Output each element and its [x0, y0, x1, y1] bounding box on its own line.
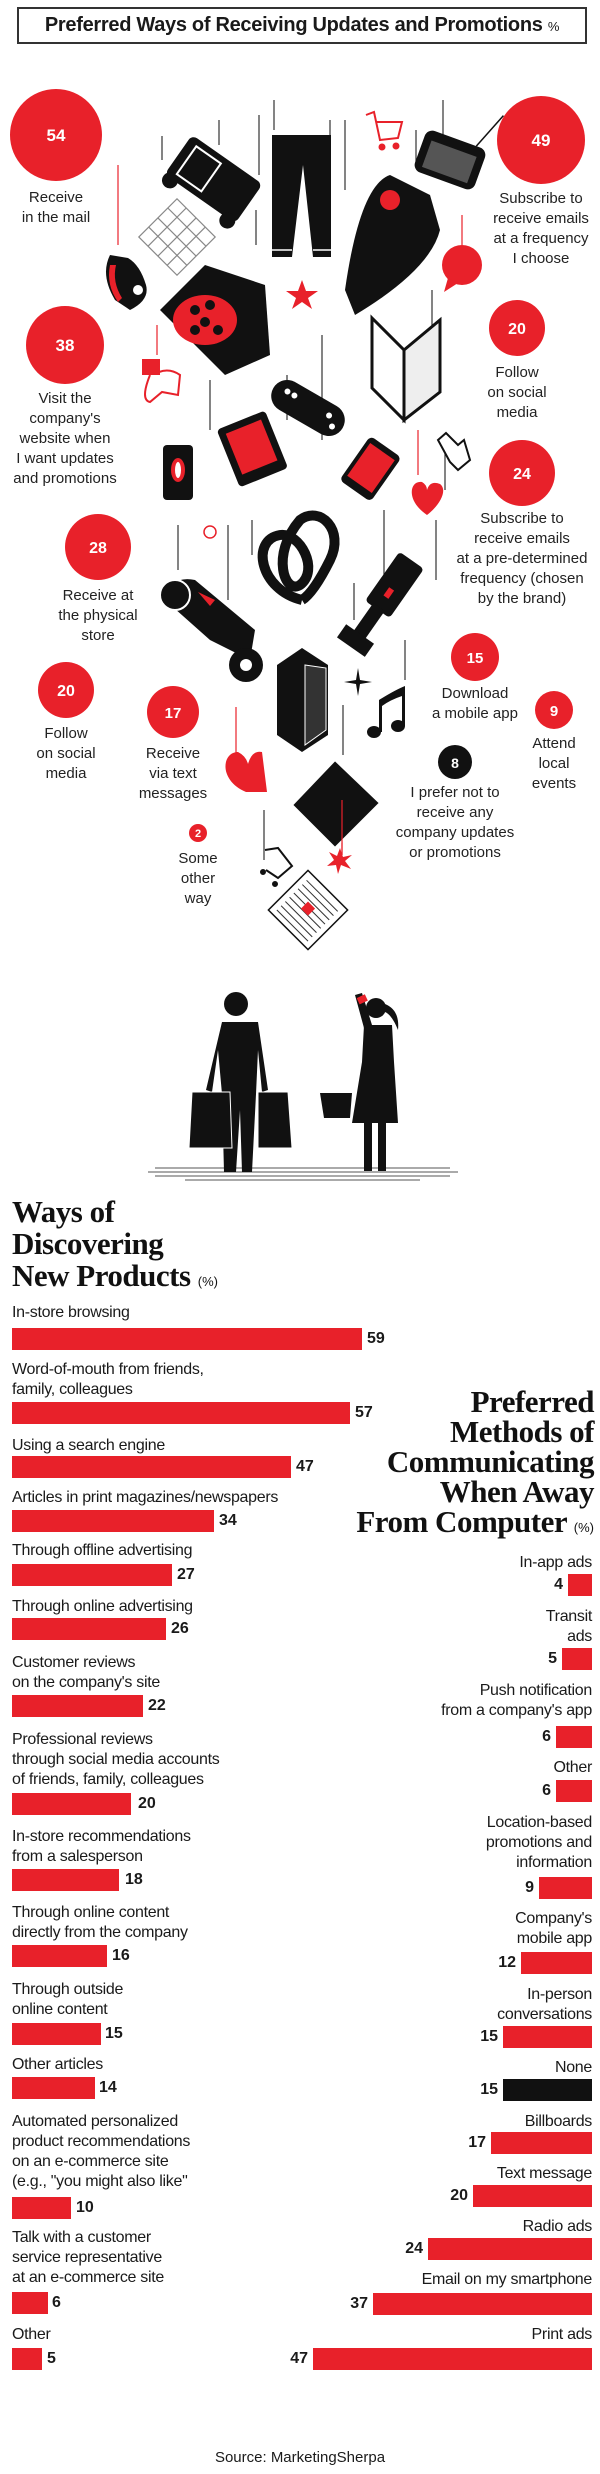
chart: discovering new products: Automated personalized [12, 2113, 178, 2130]
icon: pants [272, 135, 331, 257]
chart: discovering new products: online content [12, 2001, 107, 2018]
chart: discovering new products: Through online content [12, 1904, 169, 1921]
chart: communicating away from computer: Radio ads [523, 2218, 592, 2235]
chart: discovering new products: 10 [76, 2199, 94, 2216]
chart: communicating away from computer: information [516, 1854, 592, 1871]
icon: radio [412, 93, 503, 193]
chart: communicating away from computer: Push notification [480, 1682, 592, 1699]
icon: newspaper [268, 870, 348, 950]
circle 49 [493, 96, 589, 267]
icon: car [159, 135, 263, 232]
title: Preferred Methods of Communicating: Preferred [471, 1384, 594, 1419]
circle 20 right: on social [487, 384, 547, 401]
circle 15: Download [442, 685, 508, 702]
icon: heart small [412, 482, 443, 515]
chart: communicating away from computer: Location-based [487, 1814, 592, 1831]
chart: communicating away from computer: 4 [554, 1576, 563, 1593]
title box [17, 7, 587, 44]
icon: thumbs down [143, 360, 180, 402]
icon: red ring [204, 526, 216, 538]
icon: heart large [225, 752, 267, 792]
circle 38 [13, 306, 117, 487]
title: Preferred Methods of Communicating [356, 1384, 595, 1539]
icon: cursor hand [438, 433, 470, 470]
circle 9: Attend [532, 735, 576, 752]
circle 20 right: 20 [508, 321, 526, 338]
circle 20 left [36, 662, 96, 782]
circle 20 right: Follow [495, 364, 539, 381]
chart: discovering new products [12, 1304, 385, 2370]
circle 24: frequency (chosen [460, 570, 584, 587]
icon: pretzel [263, 516, 335, 600]
circle 9: events [532, 775, 576, 792]
chart: discovering new products: Word-of-mouth from friends, [12, 1361, 204, 1378]
chart: discovering new products: on an e-commerce site [12, 2153, 168, 2170]
icon: can [163, 445, 193, 500]
chart: discovering new products: 6 [52, 2294, 61, 2311]
chart: discovering new products: 5 [47, 2350, 56, 2367]
chart: discovering new products: 26 [171, 1620, 189, 1637]
icon: black star [344, 668, 372, 696]
circle 20 left: media [46, 765, 87, 782]
icon: drill [337, 551, 426, 657]
chart: discovering new products: 27 [177, 1566, 195, 1583]
icon: gamepad [265, 374, 351, 442]
circle 20 left: 20 [57, 683, 75, 700]
circle 54 [10, 89, 102, 226]
chart: communicating away from computer: Transit [546, 1608, 592, 1625]
chart: discovering new products: Through outside [12, 1981, 123, 1998]
illustration: update methods icon cloud [10, 89, 589, 1180]
chart: communicating away from computer [290, 1554, 592, 2370]
chart: communicating away from computer: promotions and [486, 1834, 592, 1851]
chart: discovering new products: from a salesperson [12, 1848, 143, 1865]
circle 38: company's [29, 410, 101, 427]
chart: communicating away from computer: 5 [548, 1650, 557, 1667]
chart: discovering new products: Professional reviews [12, 1731, 153, 1748]
chart: discovering new products: In-store browsing [12, 1304, 130, 1321]
icon: motorcycle [160, 579, 263, 682]
chart: communicating away from computer: mobile app [517, 1930, 592, 1947]
chart: discovering new products: Articles in print magazines/newspapers [12, 1489, 278, 1506]
chart: communicating away from computer: 37 [350, 2295, 368, 2312]
text: 59 [367, 1330, 385, 1347]
chart: discovering new products: (e.g., "you might also like" [12, 2173, 187, 2190]
circle 20 right: media [497, 404, 538, 421]
icon: pizza box [160, 265, 270, 375]
chart: discovering new products: through social media accounts [12, 1751, 219, 1768]
icon: sneaker [345, 175, 440, 315]
chart: communicating away from computer: None [555, 2059, 592, 2076]
circle 8: 8 [451, 755, 459, 771]
chart: communicating away from computer: Company's [515, 1910, 592, 1927]
icon: laptop [372, 318, 440, 420]
circle 49: Subscribe to [499, 190, 583, 207]
chart: discovering new products: 22 [148, 1697, 166, 1714]
chart: discovering new products: at an e-commerce site [12, 2269, 164, 2286]
icon: cart black [261, 848, 292, 886]
title: Ways of Discovering New Products: Discovering [12, 1226, 163, 1261]
title: Ways of Discovering New Products [12, 1194, 218, 1293]
chart: communicating away from computer: Text message [497, 2165, 592, 2182]
circle 24 [457, 440, 587, 607]
icon: tablet diamond [292, 760, 380, 855]
circle 2 [178, 824, 218, 907]
circle 9: local [539, 755, 569, 772]
circle 8: company updates [396, 824, 514, 841]
circle 2: other [181, 870, 215, 887]
circle 2: Some [178, 850, 218, 867]
circle 24: receive emails [474, 530, 570, 547]
circle 38: website when [19, 430, 110, 447]
circle 38: I want updates [16, 450, 114, 467]
chart: communicating away from computer: In-person [527, 1986, 592, 2003]
chart: communicating away from computer: 9 [525, 1879, 534, 1896]
chart: discovering new products: Using a search engine [12, 1437, 165, 1454]
circle 15: 15 [467, 650, 483, 667]
icon: red star [286, 280, 318, 309]
circle 15: a mobile app [432, 705, 518, 722]
icon: bird [106, 255, 147, 310]
chart: discovering new products: Talk with a customer [12, 2229, 151, 2246]
chart: communicating away from computer: 12 [498, 1954, 516, 1971]
chart: discovering new products: 14 [99, 2079, 117, 2096]
illustration: two shoppers [148, 992, 458, 1180]
circle 54: in the mail [22, 209, 90, 226]
chart: communicating away from computer: conversations [497, 2006, 592, 2023]
icon: speech bubble [442, 245, 482, 292]
chart: communicating away from computer: Billboards [525, 2113, 592, 2130]
circle 49: receive emails [493, 210, 589, 227]
circle 8 [396, 745, 514, 861]
circle 9 [532, 691, 576, 792]
circle 28: Receive at [63, 587, 134, 604]
circle 28: 28 [89, 540, 107, 557]
chart: discovering new products: Other articles [12, 2056, 103, 2073]
circle 9: 9 [550, 703, 558, 720]
title box: Preferred Ways of Receiving Updates and Promotions % [45, 14, 559, 36]
chart: discovering new products: Through offline advertising [12, 1542, 192, 1559]
circle 49: 49 [532, 131, 550, 150]
chart: discovering new products: product recommendations [12, 2133, 190, 2150]
circle 28 [58, 514, 138, 644]
circle 49: I choose [513, 250, 569, 267]
icon: phone [339, 436, 401, 502]
circle 54: Receive [29, 189, 83, 206]
chart: discovering new products: 18 [125, 1871, 143, 1888]
chart: discovering new products: Other [12, 2326, 51, 2343]
chart: discovering new products: on the company's site [12, 1674, 160, 1691]
chart: communicating away from computer: 17 [468, 2134, 486, 2151]
chart: communicating away from computer: Other [553, 1759, 592, 1776]
circle 17: Receive [146, 745, 200, 762]
title: Preferred Methods of Communicating: From Computer (%) [356, 1504, 594, 1539]
circle 17: messages [139, 785, 207, 802]
circle 54: 54 [47, 126, 66, 145]
chart: communicating away from computer: 15 [480, 2028, 498, 2045]
icon: calendar grid [139, 199, 215, 275]
circle 8: I prefer not to [410, 784, 500, 801]
icon: e-reader [217, 410, 288, 487]
chart: communicating away from computer: In-app ads [519, 1554, 592, 1571]
circle 24: Subscribe to [480, 510, 564, 527]
chart: discovering new products: 47 [296, 1458, 314, 1475]
circle 8: receive any [417, 804, 494, 821]
chart: communicating away from computer: ads [567, 1628, 592, 1645]
text: 57 [355, 1404, 373, 1421]
chart: communicating away from computer: 20 [450, 2187, 468, 2204]
title: Preferred Methods of Communicating: When Away [440, 1474, 594, 1509]
text: 47 [290, 2350, 308, 2367]
circle 20 right [487, 300, 547, 421]
chart: discovering new products: of friends, family, colleagues [12, 1771, 204, 1788]
chart: discovering new products: family, colleagues [12, 1381, 133, 1398]
chart: communicating away from computer: Print ads [532, 2326, 592, 2343]
chart: discovering new products: directly from the company [12, 1924, 188, 1941]
circle 24: at a pre-determined [457, 550, 587, 567]
icon: red starburst [327, 848, 352, 874]
circle 49: at a frequency [493, 230, 589, 247]
icon: shopping cart red [366, 112, 402, 150]
chart: discovering new products: 34 [219, 1512, 237, 1529]
circle 2: 2 [195, 828, 201, 840]
icon: box [277, 648, 328, 752]
circle 8: or promotions [409, 844, 501, 861]
chart: communicating away from computer: 15 [480, 2081, 498, 2098]
chart: discovering new products: 16 [112, 1947, 130, 1964]
chart: communicating away from computer: 24 [405, 2240, 423, 2257]
chart: discovering new products: 20 [138, 1795, 156, 1812]
chart: communicating away from computer: 6 [542, 1728, 551, 1745]
circle 28: the physical [58, 607, 138, 624]
icon: music note [367, 686, 405, 738]
circle 28: store [81, 627, 115, 644]
chart: discovering new products: service representative [12, 2249, 162, 2266]
title: Ways of Discovering New Products: Ways of [12, 1194, 114, 1229]
chart: communicating away from computer: 6 [542, 1782, 551, 1799]
title: Preferred Methods of Communicating: Methods of [450, 1414, 594, 1449]
title: Preferred Methods of Communicating: Communicating [387, 1444, 594, 1479]
circle 20 left: on social [36, 745, 96, 762]
chart: discovering new products: 15 [105, 2025, 123, 2042]
chart: communicating away from computer: from a company's app [441, 1702, 592, 1719]
source: Source: MarketingSherpa [215, 2449, 385, 2466]
circle 15 [432, 633, 518, 722]
circle 38: Visit the [38, 390, 92, 407]
title: Ways of Discovering New Products: New Products (%) [12, 1258, 218, 1293]
circle 20 left: Follow [44, 725, 88, 742]
chart: discovering new products: Through online advertising [12, 1598, 193, 1615]
circle 24: 24 [513, 466, 531, 483]
circle 17: via text [149, 765, 198, 782]
circle 24: by the brand) [478, 590, 566, 607]
chart: discovering new products: In-store recommendations [12, 1828, 191, 1845]
chart: communicating away from computer: Email on my smartphone [422, 2271, 592, 2288]
circle 17: 17 [165, 705, 181, 722]
chart: discovering new products: Customer reviews [12, 1654, 135, 1671]
circle 38: and promotions [13, 470, 117, 487]
circle 2: way [184, 890, 212, 907]
circle 38: 38 [56, 336, 74, 355]
circle 17 [139, 686, 207, 802]
